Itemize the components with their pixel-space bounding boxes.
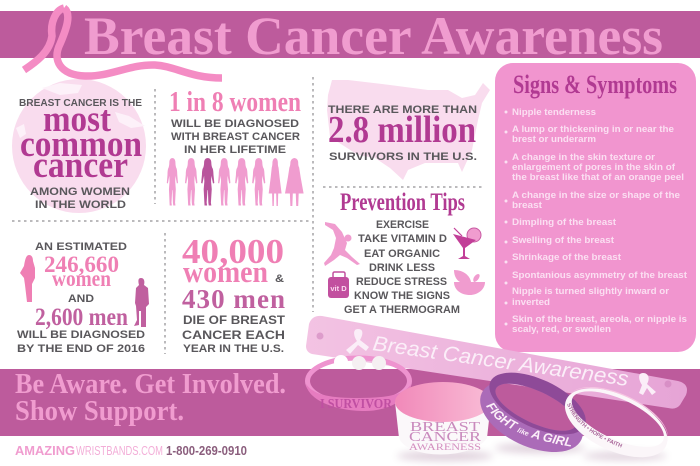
symptoms list: A change in the size or shape of the <box>512 190 680 201</box>
prevention tips list <box>344 219 460 316</box>
wristband: fight like a girl: FIGHT like A GIRL <box>486 402 571 446</box>
symptoms list: Shrinkage of the breast <box>512 252 622 263</box>
prevention tips list: TAKE VITAMIN D <box>358 233 447 245</box>
symptoms list: Dimpling of the breast <box>512 217 617 228</box>
header band <box>0 11 700 58</box>
icon: vitamin D bottle: vit D <box>330 284 347 293</box>
text: breast cancer is the most common cancer: BREAST CANCER IS THE <box>19 98 142 109</box>
symptoms list: A change in the skin texture or <box>512 152 655 163</box>
symptoms list: Nipple is turned slightly inward or <box>512 286 669 297</box>
text: 40,000 women and 430 men: women <box>183 254 268 289</box>
text: 246,660 women and 2,600 men: AN ESTIMATED <box>35 241 127 253</box>
prevention tips list: DRINK LESS <box>369 262 435 274</box>
text: 1 in 8 women <box>169 86 301 156</box>
wristband: white breast cancer awareness band <box>395 382 491 454</box>
icon: row of women silhouettes <box>167 158 304 206</box>
text: breast cancer is the most common cancer: cancer <box>33 145 128 186</box>
footer website and phone: WRISTBANDS.COM <box>76 443 163 458</box>
text: 1 in 8 women: IN HER LIFETIME <box>184 144 286 156</box>
text: breast cancer is the most common cancer: AMONG WOMEN <box>30 186 130 198</box>
icon: vitamin D bottle <box>328 272 349 298</box>
globe background <box>12 79 146 213</box>
wristband: strength hope faith: STRENGTH • HOPE • FAITH <box>567 403 622 448</box>
icon: salad bowl <box>454 270 485 295</box>
heading: prevention tips: Prevention Tips <box>340 189 465 216</box>
symptoms list: A lump or thickening in or near the <box>512 124 674 135</box>
icon: cocktail <box>453 228 481 259</box>
text: 40,000 women and 430 men: 430 men <box>182 284 285 314</box>
symptoms list: the breast like that of an orange peel <box>512 172 684 183</box>
symptoms list: Spontanious asymmetry of the breast <box>512 270 688 281</box>
footer slogan: Show Support. <box>15 395 184 427</box>
text: 246,660 women and 2,600 men: women <box>52 266 111 291</box>
icon: yoga figure <box>324 222 360 266</box>
text: 246,660 women and 2,600 men: AND <box>68 293 94 305</box>
symptoms list: scaly, red, or swollen <box>512 324 611 335</box>
text: breast cancer is the most common cancer: most <box>43 99 112 140</box>
text: 246,660 women and 2,600 men: WILL BE DIAGNOSED <box>17 329 145 341</box>
decorative dotted dividers <box>12 77 483 354</box>
text: 40,000 women and 430 men <box>182 232 285 355</box>
text: 1 in 8 women: WITH BREAST CANCER <box>171 131 300 143</box>
wristband: white breast cancer awareness band: AWARENESS <box>409 442 481 452</box>
prevention tips list: KNOW THE SIGNS <box>354 290 450 302</box>
symptoms list: Swelling of the breast <box>512 235 615 246</box>
text: 40,000 women and 430 men: & <box>275 273 284 285</box>
wristbands group <box>305 316 687 464</box>
prevention tips list: REDUCE STRESS <box>356 276 447 288</box>
text: 40,000 women and 430 men: DIE OF BREAST <box>183 315 285 327</box>
prevention tips list: EAT ORGANIC <box>364 248 440 260</box>
footer slogan: Be Aware. Get Involved. <box>15 368 286 400</box>
text: breast cancer is the most common cancer: common <box>20 124 142 165</box>
prevention tips list: EXERCISE <box>376 219 429 231</box>
symptoms list: brest or underarm <box>512 134 596 145</box>
text: 2.8 million survivors: 2.8 million <box>328 109 476 151</box>
text: breast cancer is the most common cancer <box>19 98 142 211</box>
icon: woman silhouette <box>20 255 35 302</box>
symptoms list: enlargement of pores in the skin of <box>512 162 676 173</box>
wristband: white breast cancer awareness band: CANCER <box>409 430 482 445</box>
title: Breast Cancer Awareness <box>84 6 663 66</box>
wristband: survivor band with snaps: I SURVIVOR <box>320 397 393 412</box>
wristband: survivor band with snaps <box>306 355 411 412</box>
text: 1 in 8 women: 1 in 8 women <box>169 86 301 118</box>
text: 1 in 8 women: WILL BE DIAGNOSED <box>171 118 299 130</box>
prevention tips list: GET A THERMOGRAM <box>344 304 460 316</box>
text: 40,000 women and 430 men: CANCER EACH <box>182 330 285 342</box>
wristband: breast cancer awareness slap band <box>306 316 687 409</box>
shadows under wristbands <box>397 443 667 461</box>
US map background <box>327 80 490 180</box>
symptoms list <box>504 107 688 335</box>
footer website and phone: AMAZING <box>15 443 75 458</box>
text: 2.8 million survivors: SURVIVORS IN THE U.S. <box>329 151 477 163</box>
text: 246,660 women and 2,600 men: BY THE END OF 2016 <box>17 343 145 355</box>
wristband: white breast cancer awareness band: BREAST <box>410 420 481 435</box>
text: 2.8 million survivors <box>328 104 477 163</box>
icon: pink ribbon <box>24 8 222 78</box>
text: 40,000 women and 430 men: YEAR IN THE U.S. <box>183 343 284 355</box>
wristband: strength hope faith <box>564 387 668 458</box>
text: 2.8 million survivors: THERE ARE MORE THAN <box>328 104 477 116</box>
text: 40,000 women and 430 men: 40,000 <box>182 232 284 271</box>
symptoms list: Skin of the breast, areola, or nipple is <box>512 314 687 325</box>
symptoms list: breast <box>512 200 543 211</box>
wristband: breast cancer awareness slap band: Breast Cancer Awareness <box>371 332 631 391</box>
icon: man silhouette <box>134 278 149 327</box>
panel: signs and symptoms <box>495 63 696 352</box>
footer website and phone <box>15 443 247 458</box>
text: breast cancer is the most common cancer: IN THE WORLD <box>35 199 126 211</box>
symptoms list: Nipple tenderness <box>512 107 596 118</box>
text: 246,660 women and 2,600 men <box>17 241 145 355</box>
wristband: fight like a girl <box>480 372 586 452</box>
text: 246,660 women and 2,600 men: 2,600 men <box>35 304 128 331</box>
symptoms list: inverted <box>512 297 550 308</box>
footer slogan <box>15 368 286 427</box>
text: 246,660 women and 2,600 men: 246,660 <box>44 252 119 277</box>
footer band <box>0 369 700 436</box>
footer website and phone: 1-800-269-0910 <box>166 443 247 458</box>
